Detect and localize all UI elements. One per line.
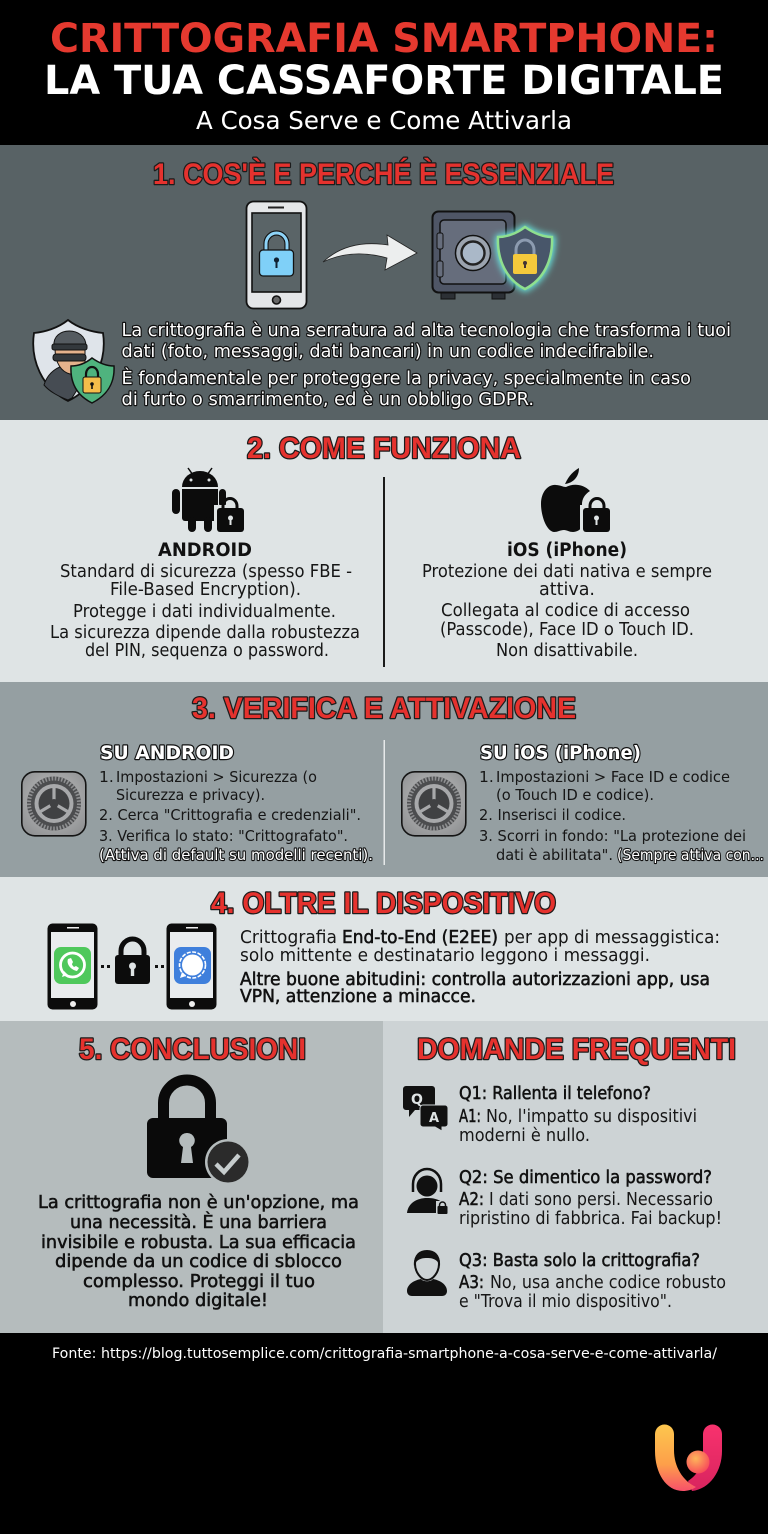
text block: android: del PIN, sequenza o password. bbox=[85, 641, 329, 661]
text block: android: Protegge i dati individualmente. bbox=[73, 602, 336, 622]
steps: ios: 1. bbox=[479, 768, 494, 786]
text block: description: di furto o smarrimento, ed è un obbligo GDPR. bbox=[122, 389, 534, 410]
text block: q2 bbox=[459, 1168, 722, 1229]
heading faq: DOMANDE FREQUENTI bbox=[417, 1033, 736, 1066]
text block: e2ee: per app di messaggistica: bbox=[504, 928, 720, 948]
text block: ios: iOS (iPhone) bbox=[507, 540, 627, 561]
text block: q2: A2: bbox=[459, 1190, 484, 1210]
text block: android: ANDROID bbox=[158, 540, 252, 561]
text block: description: È fondamentale per proteggere la privacy, specialmente in caso bbox=[122, 367, 691, 389]
panel: domande frequenti bbox=[383, 1021, 768, 1333]
panel: oltre il dispositivo bbox=[0, 877, 768, 1021]
text block: ios: Protezione dei dati nativa e sempre bbox=[422, 562, 712, 582]
text block: android: La sicurezza dipende dalla robustezza bbox=[50, 623, 360, 643]
text block: e2ee: End-to-End (E2EE) bbox=[342, 928, 498, 948]
text block: q3: No, usa anche codice robusto bbox=[490, 1273, 726, 1293]
icon: phone with lock bbox=[246, 202, 306, 308]
icon: support headset bbox=[407, 1169, 449, 1215]
text block: conclusion bbox=[38, 1193, 359, 1311]
arrow bbox=[323, 235, 417, 270]
icon: safe with shield bbox=[432, 212, 555, 299]
text block: description: dati (foto, messaggi, dati bancari) in un codice indecifrabile. bbox=[122, 341, 654, 362]
text block: q1: No, l'impatto su dispositivi bbox=[486, 1107, 697, 1127]
panel: come funziona bbox=[0, 420, 768, 682]
icon: thief with shield bbox=[33, 320, 114, 403]
source line: Fonte: https://blog.tuttosemplice.com/crittografia-smartphone-a-cosa-serve-e-come-attivarla/ bbox=[52, 1346, 717, 1362]
icon: phones with end-to-end lock bbox=[48, 924, 216, 1010]
text block: q2: ripristino di fabbrica. Fai backup! bbox=[459, 1209, 722, 1229]
text block: conclusion: dipende da un codice di sblocco bbox=[55, 1252, 342, 1272]
text block: conclusion: una necessità. È una barriera bbox=[70, 1211, 327, 1233]
text block: q3: e "Trova il mio dispositivo". bbox=[459, 1292, 672, 1312]
text block: ios: Non disattivabile. bbox=[496, 641, 638, 661]
steps: ios: (o Touch ID e codice). bbox=[496, 786, 654, 804]
heading 5: 5. CONCLUSIONI bbox=[79, 1033, 306, 1066]
icon: padlock with check bbox=[147, 1080, 251, 1185]
steps: android: Sicurezza e privacy). bbox=[116, 786, 265, 804]
icon: android with lock bbox=[172, 468, 246, 534]
panel: verifica e attivazione bbox=[0, 682, 768, 877]
heading 4: 4. OLTRE IL DISPOSITIVO bbox=[211, 887, 556, 920]
text block: q1: moderni è nullo. bbox=[459, 1126, 590, 1146]
text block: q2: Q2: Se dimentico la password? bbox=[459, 1168, 712, 1188]
text block: q1 bbox=[459, 1084, 697, 1146]
steps: ios: 2. Inserisci il codice. bbox=[479, 806, 626, 824]
icon: user bbox=[407, 1251, 447, 1296]
text block: q3: Q3: Basta solo la crittografia? bbox=[459, 1251, 700, 1271]
steps: android: (Attiva di default su modelli recenti). bbox=[99, 846, 373, 864]
title line 1: CRITTOGRAFIA SMARTPHONE: bbox=[50, 16, 718, 62]
heading 2: 2. COME FUNZIONA bbox=[247, 432, 521, 465]
text block: conclusion: complesso. Proteggi il tuo bbox=[83, 1272, 315, 1292]
icon: settings gear ios bbox=[402, 772, 466, 836]
text block: description: La crittografia è una serratura ad alta tecnologia che trasforma i tuoi bbox=[122, 320, 731, 341]
text block: ios bbox=[422, 540, 712, 661]
panel: cos'è e perché è essenziale bbox=[0, 145, 768, 420]
icon: q and a bubbles: A bbox=[429, 1111, 439, 1126]
text block: ios: attiva. bbox=[539, 580, 595, 600]
steps: ios: dati è abilitata". bbox=[496, 846, 613, 864]
text block: e2ee bbox=[240, 928, 720, 1007]
text block: e2ee: Crittografia bbox=[240, 928, 337, 948]
steps: android: SU ANDROID bbox=[100, 742, 234, 764]
text block: android: Standard di sicurezza (spesso FBE - bbox=[60, 562, 352, 582]
text block: android: File-Based Encryption). bbox=[110, 580, 301, 600]
steps: ios: 3. Scorri in fondo: "La protezione dei bbox=[479, 827, 746, 845]
text block: e2ee: Altre buone abitudini: controlla autorizzazioni app, usa bbox=[240, 970, 710, 990]
icon: q and a bubbles bbox=[403, 1086, 448, 1131]
steps: android: 2. Cerca "Crittografia e credenziali". bbox=[99, 806, 361, 824]
text block: e2ee: VPN, attenzione a minacce. bbox=[240, 987, 476, 1007]
header bbox=[44, 16, 724, 135]
text block: description bbox=[122, 320, 731, 410]
text block: q2: I dati sono persi. Necessario bbox=[489, 1190, 713, 1210]
text block: q1: Q1: Rallenta il telefono? bbox=[459, 1084, 651, 1104]
text block: q3: A3: bbox=[459, 1273, 484, 1293]
text block: ios: (Passcode), Face ID o Touch ID. bbox=[440, 620, 694, 640]
panel: conclusioni bbox=[0, 1021, 383, 1333]
subtitle: A Cosa Serve e Come Attivarla bbox=[196, 106, 572, 135]
text block: q1: A1: bbox=[459, 1107, 481, 1127]
text block: android bbox=[50, 540, 360, 661]
text block: ios: Collegata al codice di accesso bbox=[441, 601, 690, 621]
icon: settings gear android bbox=[22, 772, 86, 836]
heading 3: 3. VERIFICA E ATTIVAZIONE bbox=[192, 692, 576, 725]
text block: q3 bbox=[459, 1251, 726, 1312]
title line 2: LA TUA CASSAFORTE DIGITALE bbox=[44, 58, 724, 104]
steps: ios: SU iOS (iPhone) bbox=[480, 742, 641, 764]
steps: ios: Impostazioni > Face ID e codice bbox=[496, 768, 730, 786]
steps: android: 3. Verifica lo stato: "Crittografato". bbox=[99, 827, 348, 845]
text block: conclusion: La crittografia non è un'opzione, ma bbox=[38, 1193, 359, 1213]
heading 1: 1. COS'È E PERCHÉ È ESSENZIALE bbox=[153, 157, 614, 191]
icon: q and a bubbles: Q bbox=[411, 1092, 423, 1108]
steps: android: Impostazioni > Sicurezza (o bbox=[116, 768, 317, 786]
steps: android: 1. bbox=[99, 768, 114, 786]
text block: e2ee: solo mittente e destinatario leggono i messaggi. bbox=[240, 946, 650, 966]
icon: logo bbox=[655, 1424, 722, 1491]
text block: conclusion: invisibile e robusta. La sua efficacia bbox=[41, 1233, 356, 1253]
icon: apple with lock bbox=[541, 468, 612, 534]
text block: conclusion: mondo digitale! bbox=[128, 1291, 268, 1311]
steps: android bbox=[99, 742, 373, 864]
steps: ios bbox=[479, 742, 764, 864]
